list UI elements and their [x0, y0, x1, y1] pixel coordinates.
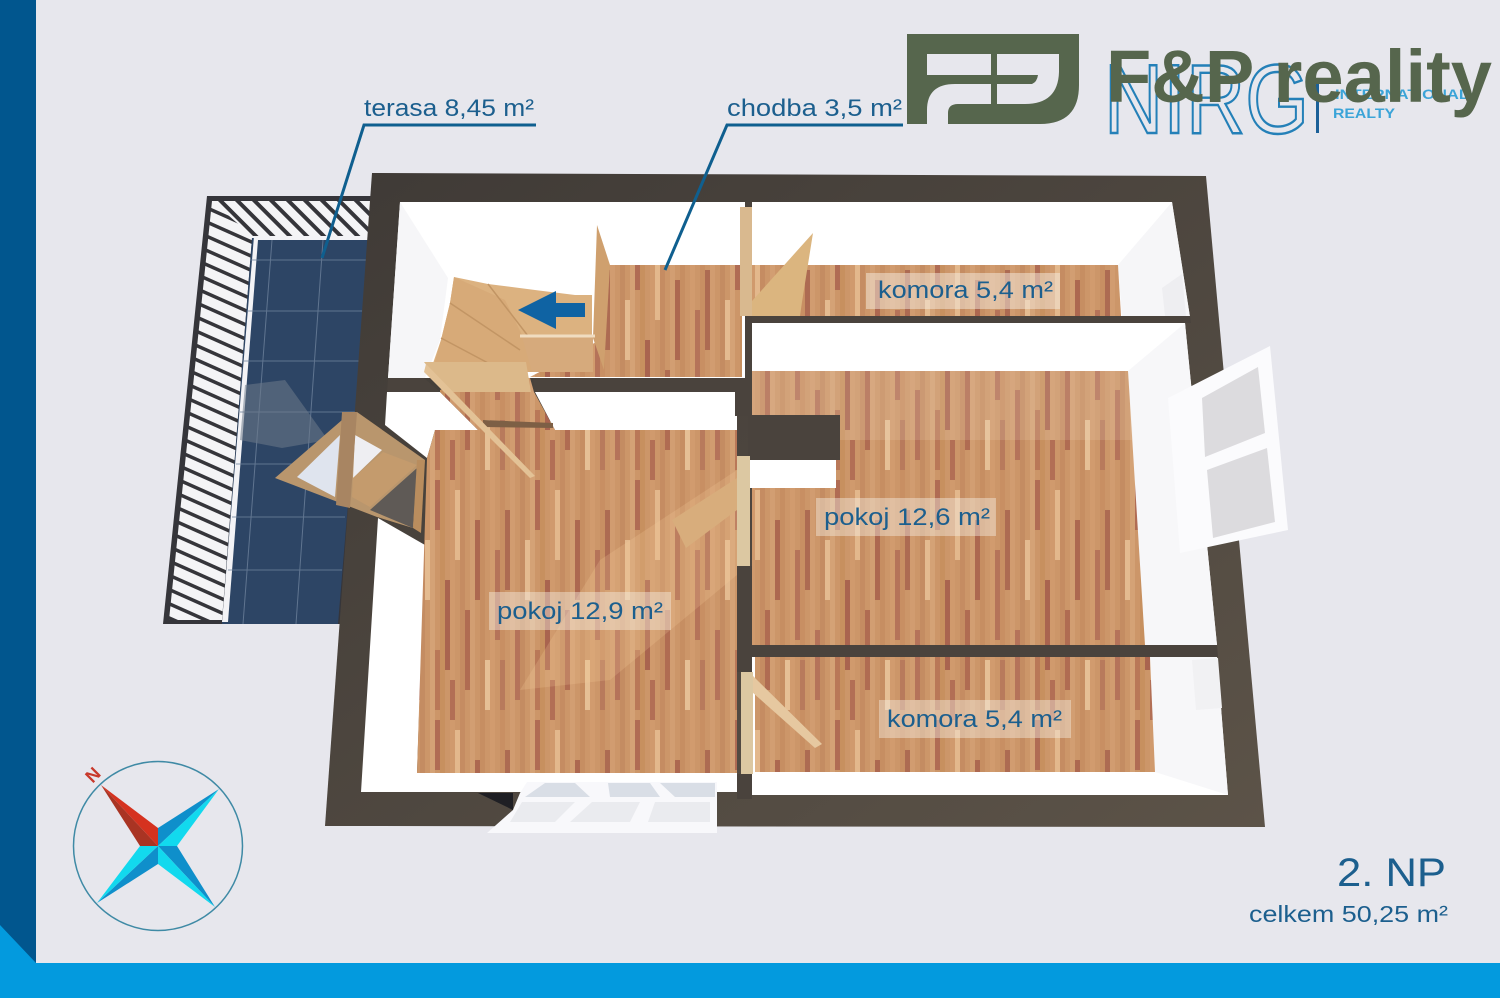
komora bottom floor [755, 657, 1155, 772]
left blue band [0, 0, 36, 963]
komora bottom door [752, 675, 822, 748]
room: komora top [740, 202, 1190, 317]
pokoj left white walls [361, 392, 737, 792]
logo: NIRG: NIRG [1104, 44, 1309, 154]
komora bottom window [1192, 658, 1222, 710]
compass north letter: N [81, 763, 105, 787]
stairs down arrow [518, 291, 585, 329]
outer walls [325, 173, 1265, 827]
label: komora bottom [879, 700, 1071, 738]
logo: NIRG: REALTY [1333, 105, 1396, 121]
logo: F&P reality wordmark: F&P reality [1106, 35, 1492, 118]
leader line: terasa [322, 125, 536, 258]
inner door [672, 456, 750, 566]
bottom blue band [0, 925, 1500, 998]
staircase [430, 225, 610, 372]
label: chodba: chodba 3,5 m² [727, 95, 902, 122]
label: komora top [866, 273, 1060, 309]
logo: NIRG: INTERNATIONAL [1335, 86, 1470, 102]
chodba floor [530, 265, 742, 377]
terrace door [275, 412, 425, 533]
label: pokoj left [489, 592, 671, 630]
leader line: chodba [665, 125, 903, 270]
floor total area: celkem 50,25 m² [1249, 901, 1448, 927]
komora bottom door frame [741, 672, 753, 774]
komora top window [1162, 274, 1186, 316]
label: komora top: komora 5,4 m² [878, 277, 1053, 304]
label: terasa: terasa 8,45 m² [364, 95, 534, 122]
label: pokoj left: pokoj 12,9 m² [497, 598, 663, 625]
label: pokoj right: pokoj 12,6 m² [824, 504, 990, 531]
chimney block [748, 415, 840, 488]
label: pokoj right [816, 498, 996, 536]
komora top door [752, 233, 813, 316]
pokoj left floor [417, 392, 737, 773]
logo: NIRG [1104, 44, 1470, 154]
terrace [163, 196, 372, 624]
dividing walls [387, 202, 1218, 799]
room: chodba [388, 202, 745, 378]
compass [74, 762, 242, 930]
logo: F&P mark [907, 34, 1079, 124]
bottom window [478, 782, 717, 833]
terrace railing [163, 196, 372, 624]
floor title: 2. NP [1337, 851, 1446, 895]
right window [1168, 346, 1288, 553]
room: pokoj right [748, 323, 1217, 645]
pokoj right floor [752, 371, 1145, 645]
komora top floor [752, 265, 1121, 316]
room: komora bottom [741, 657, 1228, 795]
door shadow strip [483, 420, 553, 428]
room: pokoj left [361, 362, 750, 792]
label: komora bottom: komora 5,4 m² [887, 706, 1062, 733]
pokoj left door [424, 362, 535, 478]
terrace floor tiles [222, 236, 370, 624]
komora top door frame [740, 207, 752, 316]
